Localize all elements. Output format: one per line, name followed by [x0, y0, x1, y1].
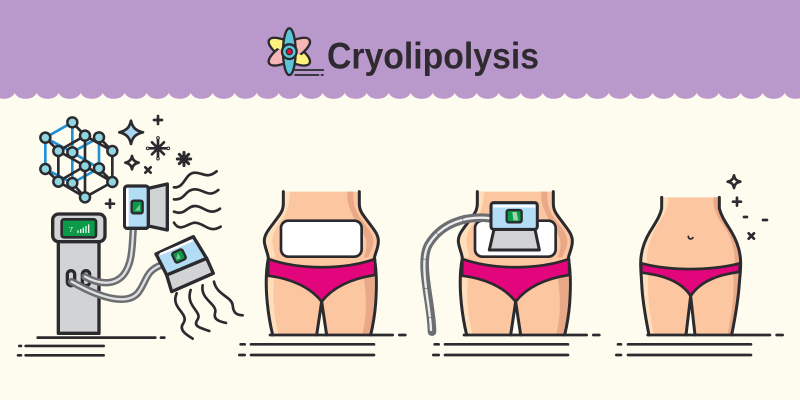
- title: Cryolipolysis: [327, 36, 539, 76]
- applicator on body with hose: [424, 203, 539, 332]
- gel pad: [475, 221, 556, 257]
- icon: crystal molecule: [40, 117, 117, 202]
- underwear: [641, 263, 740, 296]
- ground lines: [433, 335, 599, 355]
- sparkles: [728, 175, 740, 188]
- ground lines: [239, 335, 405, 355]
- header band with scalloped edge: [0, 0, 800, 99]
- cables: [72, 228, 162, 299]
- ground lines: [616, 335, 783, 355]
- icon: atom: [265, 28, 323, 75]
- navel: [688, 236, 693, 239]
- panel: body with applicator: [433, 192, 599, 355]
- panel: body with gel pad: [239, 192, 405, 355]
- cold waves: [174, 171, 243, 339]
- machine body: [53, 214, 105, 333]
- machine screen: 7: [69, 225, 73, 234]
- ground lines: [18, 338, 164, 355]
- applicator lower: [156, 237, 213, 292]
- panel: cryolipolysis machine: [18, 116, 243, 355]
- applicator upper: [125, 184, 167, 230]
- icons: sparkles and snowflakes: [106, 116, 191, 208]
- gel pad: [281, 221, 362, 257]
- panel: slim body result: [616, 175, 783, 355]
